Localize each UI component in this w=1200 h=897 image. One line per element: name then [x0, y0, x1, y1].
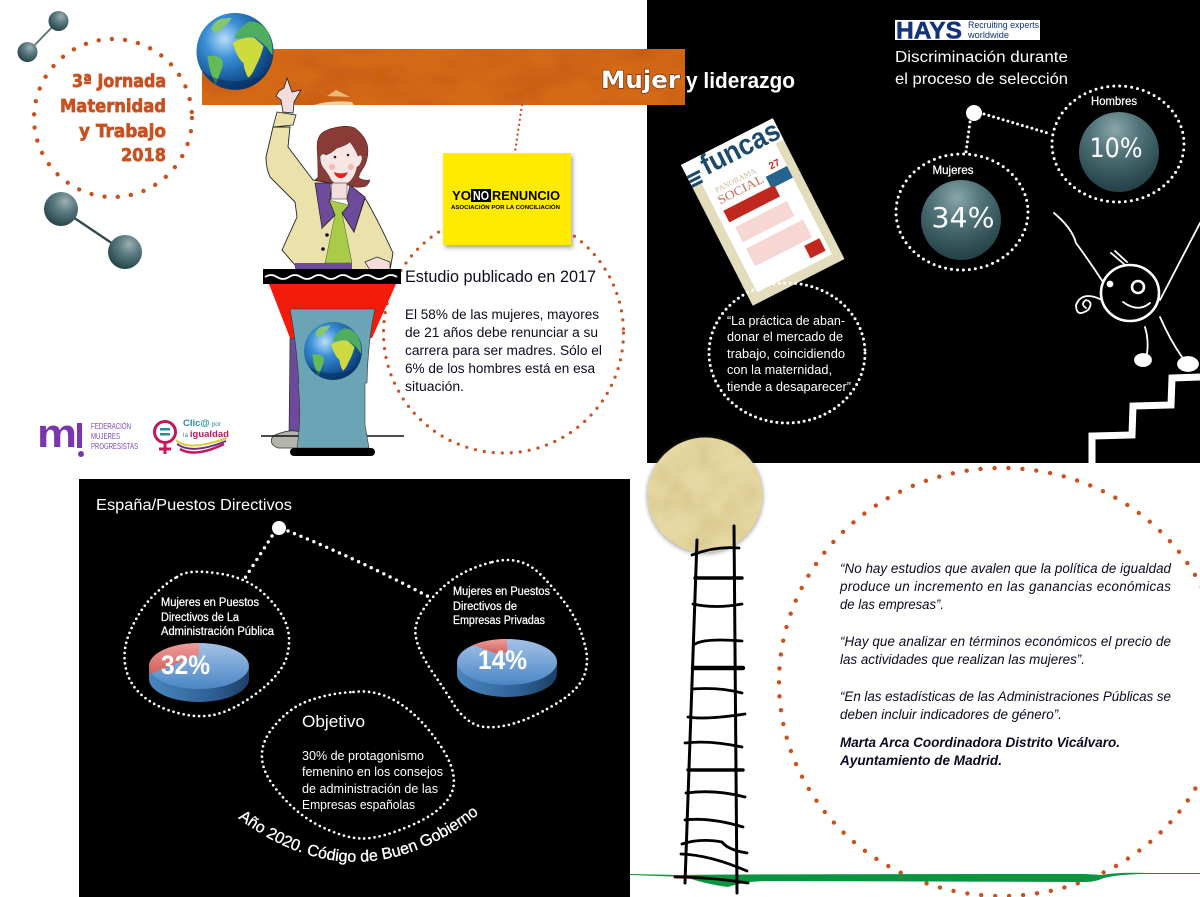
- text block: expert quotes: “Hay que analizar en términos económicos el precio de: [840, 634, 1171, 649]
- text block: study findings: [405, 307, 602, 394]
- icon: small molecule: [18, 11, 68, 62]
- book: Funcas Panorama Social: [679, 115, 845, 306]
- dotted connectors: España: [245, 521, 431, 598]
- stat: Mujeres 34%: 34%: [932, 201, 994, 234]
- black panel: bottom left: [79, 479, 630, 897]
- text block: expert quotes: produce un incremento en las ganancias económicas: [839, 579, 1171, 594]
- logo: Yo No Renuncio: RENUNCIO: [492, 189, 560, 203]
- event badge: 3a Jornada: [34, 39, 192, 197]
- text block: expert quotes: Ayuntamiento de Madrid.: [839, 753, 1002, 768]
- icon: moon: [647, 438, 763, 554]
- blob: objective: Objetivo: [302, 713, 365, 731]
- stat: Hombres 10%: Hombres: [1091, 94, 1137, 108]
- logo: Yo No Renuncio: YO: [452, 189, 471, 203]
- quote: Funcas: [709, 283, 865, 423]
- blob: public administration: Administración Pública: [161, 626, 275, 638]
- pie chart: 14%: [457, 639, 557, 697]
- heading: selection discrimination: Discriminación durante: [895, 49, 1068, 66]
- book: Funcas Panorama Social: PANORAMA: [713, 166, 758, 195]
- text block: expert quotes: “No hay estudios que avalen que la política de igualdad: [840, 561, 1172, 576]
- banner: orange title strip: [202, 49, 685, 105]
- blob: public administration: [124, 572, 289, 716]
- heading: España: España/Puestos Directivos: [96, 497, 292, 514]
- text block: expert quotes: de las empresas”.: [840, 597, 944, 612]
- heading: selection discrimination: [895, 49, 1068, 88]
- text block: expert quotes: [839, 561, 1172, 768]
- blob: objective: Empresas españolas: [302, 798, 415, 812]
- dotted connectors: Hays: [966, 105, 1051, 152]
- event badge: 3a Jornada: y Trabajo: [79, 121, 166, 142]
- logo: Federación Mujeres Progresistas: m: [37, 412, 77, 456]
- logo: Clic@ por la igualdad: la igualdad: [183, 429, 229, 440]
- globe: banner: [196, 13, 274, 90]
- text block: study findings: situación.: [405, 379, 464, 394]
- blob: private companies: Mujeres en Puestos: [453, 586, 550, 598]
- illustration: stick figure on stairs: [1054, 213, 1200, 463]
- text block: expert quotes: deben incluir indicadores de género”.: [840, 707, 1062, 722]
- pie chart: 14%: 14%: [478, 645, 527, 675]
- ground: green strip: [630, 873, 1200, 887]
- logo: Federación Mujeres Progresistas: FEDERACIÓN: [91, 421, 131, 431]
- logo: Yo No Renuncio: ASOCIACIÓN POR LA CONCILIACIÓN: [451, 203, 560, 211]
- blob: private companies: Empresas Privadas: [453, 615, 545, 627]
- stat: Hombres 10%: 10%: [1090, 133, 1142, 164]
- quote: Funcas: con la maternidad,: [727, 362, 832, 377]
- logo: Yo No Renuncio: NO: [473, 189, 489, 203]
- blob: private companies: [415, 560, 587, 727]
- text block: study findings: carrera para ser madres. Sólo el: [405, 343, 602, 358]
- blob: objective: de administración de las: [302, 782, 438, 796]
- logo: Clic@ por la igualdad: [154, 418, 229, 454]
- logo: Hays: worldwide: [967, 30, 1009, 41]
- stat: Hombres 10%: [1052, 86, 1184, 202]
- logo: Federación Mujeres Progresistas: PROGRESISTAS: [91, 441, 138, 451]
- title: Mujer y liderazgo: [601, 66, 795, 94]
- event badge: 3a Jornada: Maternidad: [60, 96, 166, 117]
- dotted connector: banner to logo: [515, 105, 522, 152]
- illustration: ladder: [675, 526, 748, 893]
- text block: study findings: El 58% de las mujeres, mayores: [405, 307, 599, 322]
- heading: selection discrimination: el proceso de selección: [895, 71, 1068, 88]
- stat: Mujeres 34%: Mujeres: [932, 163, 974, 177]
- black panel: top right: [647, 0, 1200, 463]
- curved caption: Código de Buen Gobierno: Año 2020. Código de Buen Gobierno: [238, 808, 478, 865]
- logo: Yo No Renuncio: [443, 153, 573, 248]
- logo: Hays: Recruiting experts: [968, 20, 1039, 31]
- book: Funcas Panorama Social: SOCIAL: [715, 172, 766, 207]
- blob: objective: femenino en los consejos: [302, 765, 443, 779]
- logo: Clic@ por la igualdad: Clic@ por: [183, 418, 222, 429]
- icon: large molecule: [44, 192, 142, 269]
- text block: expert quotes: “En las estadísticas de las Administraciones Públicas se: [840, 689, 1171, 704]
- quote: Funcas: “La práctica de aban-: [727, 313, 845, 328]
- text block: study findings: de 21 años debe renunciar a su: [405, 325, 598, 340]
- event badge: 3a Jornada: 2018: [121, 145, 166, 166]
- dotted circle: quote: [779, 468, 1200, 896]
- stat: Mujeres 34%: [896, 154, 1028, 270]
- logo: Federación Mujeres Progresistas: [37, 412, 138, 457]
- dotted circle: study: [384, 213, 624, 453]
- quote: Funcas: tiende a desaparecer”: [727, 379, 851, 394]
- event badge: 3a Jornada: 3ª Jornada: [72, 71, 166, 92]
- pie chart: 32%: 32%: [161, 650, 210, 680]
- blob: objective: [262, 691, 454, 839]
- pie chart: 32%: [149, 643, 249, 702]
- globe: podium: [304, 322, 362, 380]
- blob: private companies: Directivos de: [453, 601, 517, 613]
- logo: Hays: [895, 18, 1040, 44]
- title: Mujer y liderazgo: y liderazgo: [686, 68, 795, 93]
- illustration: woman at podium: [261, 78, 404, 456]
- text block: study findings: 6% de los hombres está en esa: [405, 361, 595, 376]
- text block: expert quotes: las actividades que realizan las mujeres”.: [840, 652, 1085, 667]
- book: Funcas Panorama Social: funcas: [695, 115, 785, 182]
- book: Funcas Panorama Social: 27: [767, 157, 783, 172]
- text block: expert quotes: Marta Arca Coordinadora Distrito Vicálvaro.: [840, 735, 1120, 750]
- blob: objective: 30% de protagonismo: [302, 749, 424, 763]
- blob: public administration: Directivos de La: [161, 612, 240, 624]
- logo: Hays: HAYS: [896, 18, 962, 44]
- blob: public administration: Mujeres en Puestos: [161, 597, 259, 609]
- title: Mujer y liderazgo: Mujer: [601, 66, 680, 94]
- quote: Funcas: donar el mercado de: [727, 329, 843, 344]
- heading: study: Estudio publicado en 2017: [405, 267, 596, 286]
- logo: Federación Mujeres Progresistas: MUJERES: [91, 431, 120, 441]
- quote: Funcas: trabajo, coincidiendo: [727, 346, 845, 361]
